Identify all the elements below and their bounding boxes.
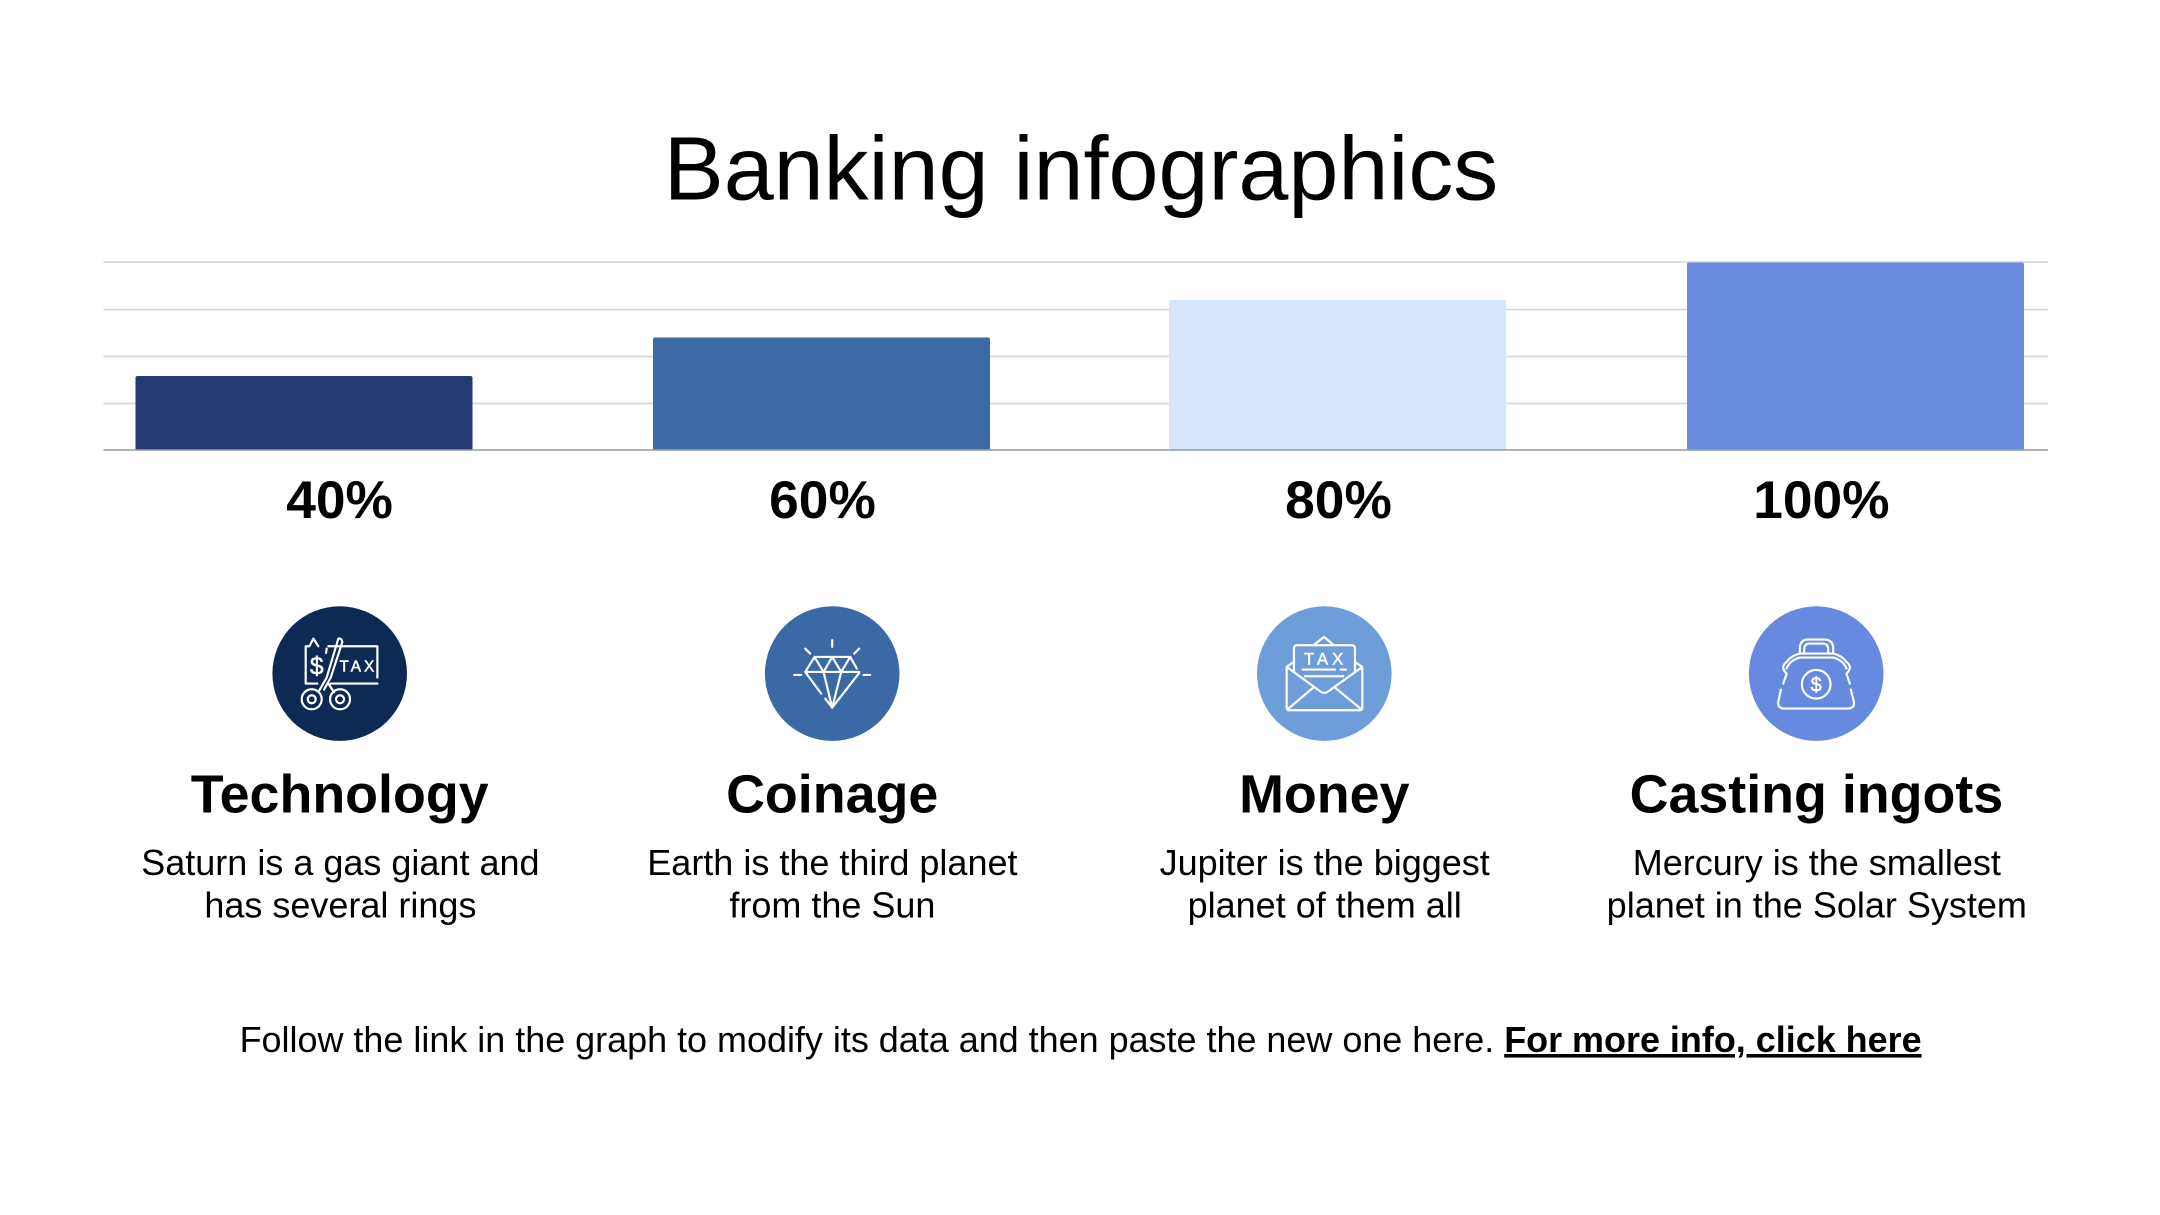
- description: Casting ingots: [1607, 842, 2027, 926]
- icon: tax scissors: TAX: [340, 659, 377, 676]
- icon: money bag: $: [1811, 675, 1822, 697]
- description: Coinage: Earth is the third planet: [647, 842, 1018, 883]
- column: Casting ingots: [1607, 764, 2027, 926]
- heading: Technology: Technology: [191, 764, 489, 824]
- description: Casting ingots: planet in the Solar System: [1607, 884, 2027, 926]
- description: Casting ingots: Mercury is the smallest: [1633, 842, 2001, 883]
- column: Coinage: [647, 764, 1018, 926]
- heading: Money: Money: [1239, 764, 1410, 824]
- bar chart: [104, 262, 2048, 450]
- description: Technology: [141, 842, 540, 926]
- icon: tax envelope: [1257, 606, 1392, 741]
- description: Coinage: from the Sun: [729, 884, 935, 926]
- description: Money: Jupiter is the biggest: [1160, 842, 1490, 883]
- description: Technology: Saturn is a gas giant and: [141, 842, 540, 883]
- value label: 100%: 100%: [1753, 471, 1890, 530]
- value label: 60%: 60%: [769, 471, 876, 530]
- title: Banking infographics: [664, 120, 1498, 220]
- bar: 60%: [653, 338, 990, 450]
- description: Money: [1160, 842, 1490, 926]
- heading: Casting ingots: Casting ingots: [1630, 764, 2003, 824]
- column: Money: [1160, 764, 1490, 926]
- column: Technology: [141, 764, 540, 926]
- footer note with link: Follow the link in the graph to modify its data and then paste the new one here. For more info, click here: [240, 1019, 1922, 1060]
- heading: Coinage: Coinage: [726, 764, 938, 824]
- value label: 40%: 40%: [286, 471, 393, 530]
- icon: money bag: [1749, 606, 1884, 741]
- bar: 40%: [136, 376, 472, 450]
- bar: 80%: [1169, 300, 1506, 450]
- description: Technology: has several rings: [204, 884, 476, 926]
- icon: diamond: [765, 606, 900, 741]
- icon: tax scissors: [272, 606, 407, 741]
- icon: tax envelope: TAX: [1304, 649, 1347, 668]
- value label: 80%: 80%: [1285, 471, 1392, 530]
- description: Coinage: [647, 842, 1018, 926]
- description: Money: planet of them all: [1188, 884, 1462, 926]
- bar: 100%: [1687, 262, 2024, 450]
- icon: tax scissors: $: [310, 653, 324, 680]
